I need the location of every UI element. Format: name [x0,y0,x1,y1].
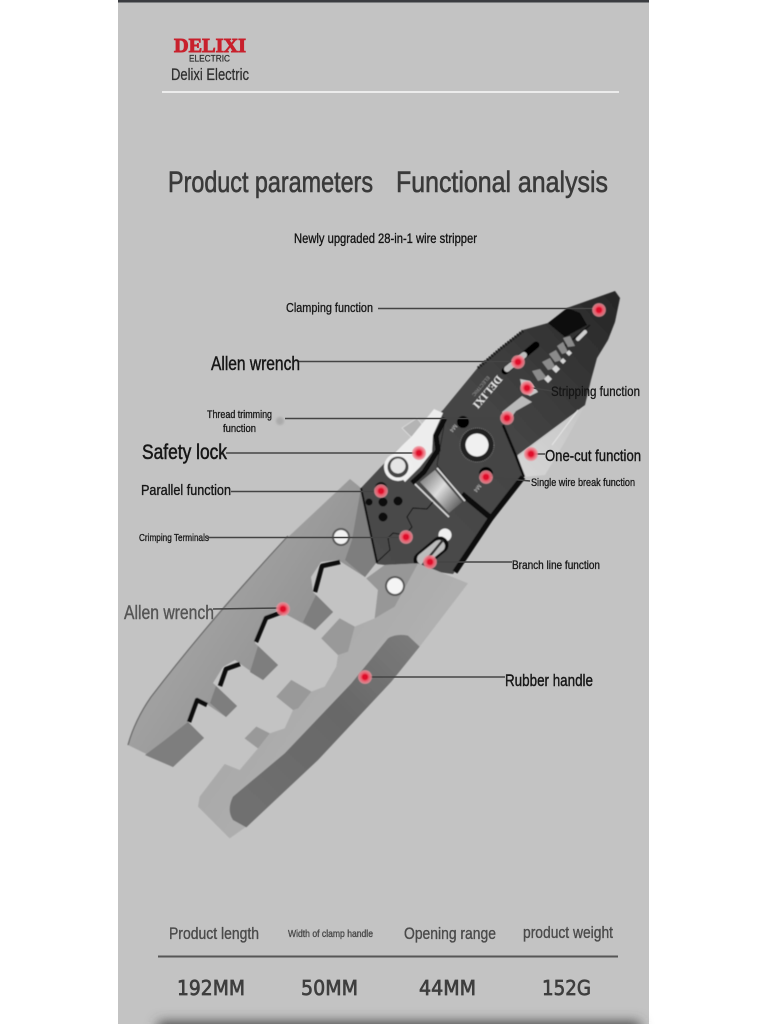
callout labels [124,300,641,690]
spring [415,468,465,517]
wire stripper illustration [128,291,620,838]
label: stripping function: Stripping function [551,383,640,399]
label: thread trimming function [207,409,272,435]
label: thread trimming function: function [223,423,256,435]
brand logo: DELIXI [174,35,246,57]
label: rubber handle: Rubber handle [505,671,593,690]
label: single wire break function: Single wire break function [531,477,635,489]
stripping notches [520,336,575,396]
specification values [177,976,591,1000]
label: one-cut function: One-cut function [545,448,641,465]
bottom shadow [158,1022,640,1024]
label: allen wrench upper: Allen wrench [211,354,300,375]
branch line slot [421,540,443,567]
main heading: Functional analysis [396,166,608,199]
specification values: 44MM [419,976,476,1000]
right handle [198,563,468,838]
handle rivets [332,528,405,596]
tool brand mark: ELECTRIC [470,374,491,398]
brand logo: ELECTRIC [189,54,230,64]
specification values: 50MM [301,976,358,1000]
brand name: Delixi Electric [171,65,249,84]
size marks: M4 [447,423,458,433]
label: crimping terminals: Crimping Terminals [139,532,209,544]
size marks [447,423,482,493]
allen wrench slot [505,345,536,371]
safety lock lever [384,409,445,483]
hex plate outline [361,420,524,572]
crimping jaw line [377,502,433,562]
subtitle: Newly upgraded 28-in-1 wire stripper [294,230,477,246]
specification values: 192MM [177,976,245,1000]
one-cut blade [516,407,584,477]
thread trimming blade [502,396,532,422]
label: clamping function: Clamping function [286,300,373,315]
upper jaw and body [361,291,620,574]
specification headers [169,923,613,943]
specification headers: product weight [523,923,613,942]
tool brand mark: DELIXI [470,373,504,410]
main heading [168,166,608,199]
page panel background [118,0,649,1024]
left handle [128,479,376,767]
pivot screw [460,428,494,462]
label: parallel function: Parallel function [141,482,231,499]
blot near thread trimming label [276,417,284,425]
specification headers: Product length [169,924,259,943]
specification headers: Width of clamp handle [288,928,373,940]
size marks: M4 [471,483,482,493]
specification headers: Opening range [404,924,496,943]
silver cylinder [402,418,425,438]
leader lines [208,308,598,677]
main heading: Product parameters [168,166,373,199]
jaw black insert [548,308,587,337]
label: safety lock: Safety lock [142,441,227,464]
label: branch line function: Branch line function [512,558,600,572]
top dark edge [118,0,649,2]
label: allen wrench lower: Allen wrench [124,603,214,624]
red callout dots [276,303,606,684]
holes on body [366,416,493,570]
label: thread trimming function: Thread trimming [207,409,272,421]
specification values: 152G [542,976,591,1000]
